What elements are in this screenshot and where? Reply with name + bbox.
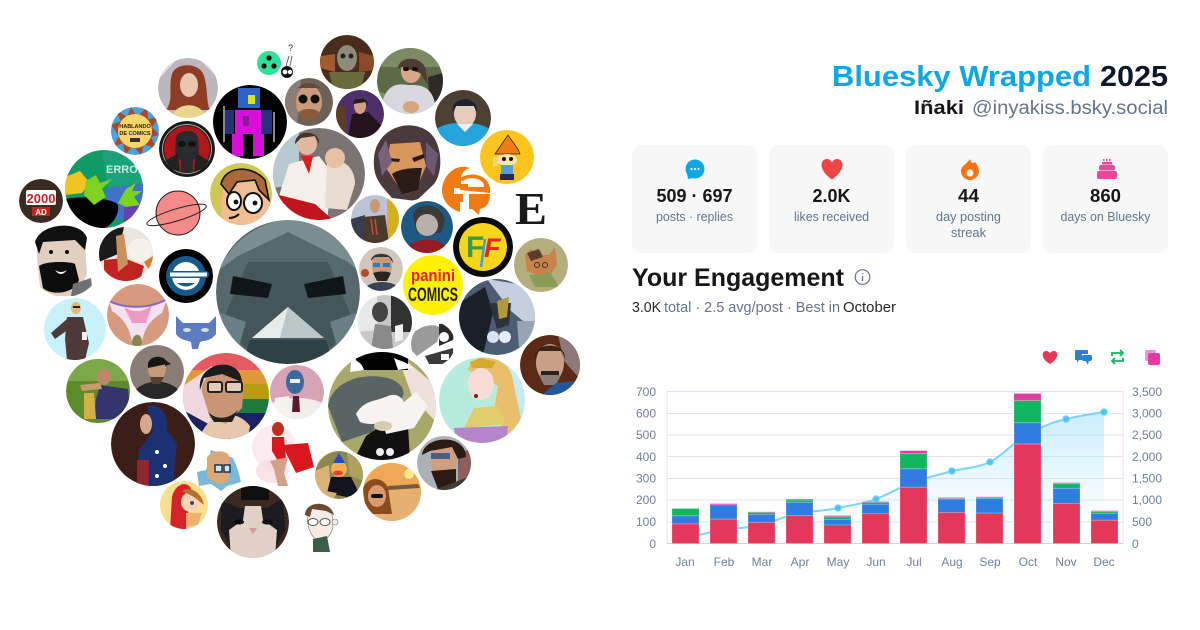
avatar: engraved glyph [411, 324, 454, 364]
avatar: Scarlet Witch [252, 422, 314, 486]
month labels: Mar [752, 555, 772, 569]
user name and handle: @inyakiss.bsky.social [972, 98, 1168, 119]
icon: replies bubbles [1075, 350, 1092, 365]
left axis labels: 0 [649, 537, 656, 551]
left axis labels: 300 [636, 472, 656, 486]
stat card: likes received: likes received [794, 209, 869, 224]
avatar: Hablando de Comics: DE COMICS [119, 131, 151, 137]
avatar: long-haired bearded man [374, 125, 440, 200]
right axis labels: 1,000 [1132, 493, 1162, 507]
avatar: cartoon face on yellow [210, 163, 272, 225]
avatar: man with pride flag background [183, 353, 269, 439]
chart: monthly engagement [636, 385, 1162, 569]
stat card: posts and replies: 509 · 697 [656, 185, 732, 206]
bar: Apr [786, 499, 813, 544]
avatar: man in sunglasses [285, 78, 333, 126]
heading: Your Engagement: Your Engagement [632, 264, 845, 292]
cumulative points [835, 409, 1107, 511]
avatar: 2000 AD [19, 179, 63, 223]
month labels: Jan [675, 555, 695, 569]
avatar: woman on purple wall [336, 90, 384, 138]
avatar: big inky cartoon character [328, 352, 436, 460]
avatar: woman in sunglasses [377, 48, 443, 114]
engagement summary: 3.0K [632, 300, 661, 316]
stat card: posting streak [906, 145, 1031, 253]
left axis labels [636, 385, 656, 551]
avatar: Hablando de Comics [111, 107, 159, 155]
month labels: Apr [791, 555, 809, 569]
title: Bluesky Wrapped [832, 61, 1091, 93]
avatar: FF yellow badge: F [466, 231, 484, 264]
avatar: FF yellow badge [453, 217, 513, 277]
avatar: big armored moon face [216, 220, 360, 364]
stat card: likes received [769, 145, 894, 253]
avatar: pink planet [145, 188, 208, 238]
avatar: Panini Comics [403, 255, 463, 315]
right axis labels: 2,000 [1132, 450, 1162, 464]
icon: info [855, 270, 870, 284]
month labels: Oct [1019, 555, 1038, 569]
bar: Sep [976, 497, 1003, 544]
avatar: man in dark tee [351, 195, 399, 243]
avatar: luchador in white suit [270, 365, 324, 419]
bar: Nov [1053, 483, 1080, 544]
month labels [675, 555, 1115, 569]
engagement summary: October [843, 300, 896, 316]
avatar: blonde man in suit [44, 298, 106, 360]
stat card: days on Bluesky: days on Bluesky [1060, 209, 1151, 224]
stat card: days on Bluesky: 860 [1090, 185, 1121, 206]
avatar: Panini Comics: panini [411, 266, 455, 285]
avatar: green claws error screen [65, 150, 146, 228]
avatar: blue cat mask [176, 316, 216, 349]
bar: Aug [938, 498, 965, 544]
bar: Jan [672, 508, 699, 544]
avatar: 2000 AD: AD [35, 208, 47, 217]
month labels: Dec [1093, 555, 1115, 569]
avatar: girl with baby [273, 128, 365, 220]
avatar: dark helmet on red [159, 121, 215, 177]
avatar: laughing man logo [159, 249, 213, 303]
icon: likes heart [1043, 351, 1057, 364]
avatar: woman at sunset [363, 463, 421, 521]
icon: quotes copy [1145, 350, 1160, 365]
avatar: Panini Comics: COMICS [408, 285, 458, 306]
avatar: black and white man [358, 295, 412, 349]
stat card: posts and replies [632, 145, 757, 253]
avatar: red riding hood [160, 481, 208, 529]
avatar: E logo [504, 182, 558, 236]
bar: Feb [710, 504, 737, 544]
icon: chat bubble [686, 160, 704, 179]
avatar: man in cap [130, 345, 184, 399]
avatar: man in blue glasses [359, 247, 403, 291]
user name and handle: Iñaki [914, 98, 964, 119]
cumulative line [685, 412, 1104, 538]
avatar: fox illustration [514, 238, 568, 292]
stat card: days on Bluesky [1043, 145, 1168, 253]
month labels: Aug [941, 555, 963, 569]
month labels: May [827, 555, 849, 569]
avatar: man in blue shirt [435, 90, 491, 146]
right axis labels: 2,500 [1132, 428, 1162, 442]
left axis labels: 200 [636, 493, 656, 507]
right axis labels: 0 [1132, 537, 1139, 551]
avatar cluster [19, 35, 580, 558]
stat card: likes received: 2.0K [812, 185, 851, 206]
avatar: Zelda illustration [439, 357, 525, 443]
avatar: E logo: E [515, 183, 547, 234]
avatar: comic panel [99, 227, 153, 281]
avatar: child on blue [401, 201, 453, 253]
avatar: hijab in blue with stars [111, 402, 195, 486]
right axis labels: 1,500 [1132, 472, 1162, 486]
bar: May [824, 516, 851, 544]
avatar: orange f speech logo [442, 167, 490, 215]
avatar: 2000 AD: 2000 [27, 191, 55, 206]
engagement summary [632, 300, 896, 316]
title: 2025 [1100, 61, 1168, 93]
left axis labels: 600 [636, 406, 656, 420]
right axis labels: 3,000 [1132, 406, 1162, 420]
avatar: pixel robot [213, 85, 287, 159]
avatar: nerd with glasses [305, 504, 338, 552]
avatar: skull armour [320, 35, 374, 89]
left axis labels: 700 [636, 385, 656, 399]
avatar: red-haired woman [158, 58, 218, 118]
month labels: Feb [714, 555, 735, 569]
avatar: black and white cat [217, 486, 289, 558]
right axis labels: 500 [1132, 515, 1152, 529]
bar: Jul [900, 451, 927, 544]
avatar: green skull with question mark [257, 43, 293, 78]
stacked bars [672, 394, 1118, 544]
month labels: Jul [906, 555, 922, 569]
avatar: FF yellow badge: F [484, 233, 502, 263]
right axis labels: 3,500 [1132, 385, 1162, 399]
month labels: Jun [866, 555, 886, 569]
avatar: PaRappa orange hat [480, 130, 534, 184]
right axis labels [1132, 385, 1162, 551]
avatar: puppet with blue hair [315, 451, 363, 499]
legend [1043, 350, 1160, 365]
bar: Dec [1091, 511, 1118, 544]
stat card: posts and replies: posts · replies [656, 209, 733, 224]
icon: cake [1097, 159, 1117, 179]
stat card: posting streak: streak [951, 225, 986, 240]
bar: Oct [1014, 394, 1041, 544]
icon: heart [822, 159, 842, 180]
icon: flame [961, 159, 979, 180]
avatar: Hablando de Comics: HABLANDO [119, 124, 151, 130]
bar: Jun [862, 502, 889, 544]
avatar: man with bottle [66, 359, 130, 423]
avatar: man with bearded face looking down [417, 436, 471, 490]
bar: Mar [748, 512, 775, 544]
left axis labels: 400 [636, 450, 656, 464]
avatar: silver armoured hero [459, 279, 535, 355]
left axis labels: 100 [636, 515, 656, 529]
avatar: bearded cartoon man [35, 226, 92, 296]
month labels: Sep [979, 555, 1001, 569]
avatar: green skull with question mark: ? [288, 43, 293, 53]
stat card: posting streak: day posting [936, 209, 1001, 224]
month labels: Nov [1055, 555, 1077, 569]
cumulative area [685, 412, 1104, 544]
engagement summary: total · 2.5 avg/post · Best in [664, 300, 840, 316]
stat card: posting streak: 44 [958, 185, 980, 206]
left axis labels: 500 [636, 428, 656, 442]
avatar: older man with moustache [520, 335, 580, 395]
icon: reposts arrows [1112, 350, 1123, 364]
avatar: lilac underwear [107, 284, 169, 346]
avatar: green claws error screen: ERROR [106, 164, 146, 176]
avatar: cardboard head with glasses [197, 450, 241, 491]
